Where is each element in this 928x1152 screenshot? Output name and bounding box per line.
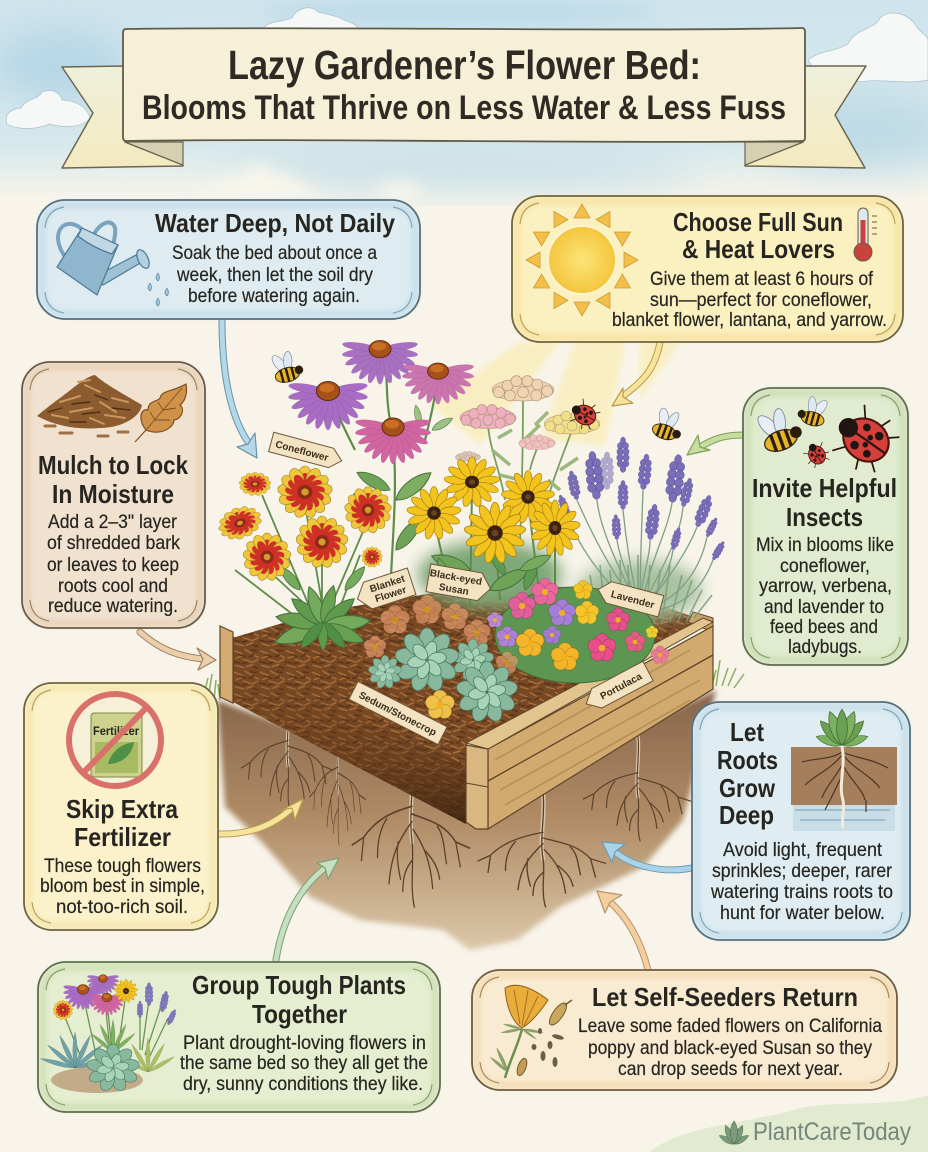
body text: reduce watering.: [48, 595, 178, 617]
plant: yarrow: [455, 376, 600, 540]
body text: before watering again.: [188, 285, 360, 307]
body text: can drop seeds for next year.: [618, 1058, 843, 1080]
bees and ladybug near flowers: [268, 348, 688, 444]
sun rays: [430, 342, 680, 445]
banner right tail: [745, 66, 866, 168]
coneflower heads: [342, 340, 418, 384]
panel box: [743, 388, 908, 665]
body text: [710, 839, 893, 924]
body text: Add a 2–3" layer: [48, 511, 177, 533]
top rim of side: [466, 618, 713, 749]
body text: Plant drought-loving flowers in: [183, 1032, 426, 1054]
heading: Let: [730, 717, 764, 747]
panel box: [37, 200, 420, 319]
heading: & Heat Lovers: [682, 234, 835, 264]
heading: Insects: [786, 502, 863, 532]
body text: [40, 855, 205, 918]
heading: Skip Extra: [66, 794, 178, 824]
panel: mulch: [22, 362, 205, 628]
body text: poppy and black-eyed Susan so they: [588, 1037, 872, 1059]
panel box: [22, 362, 205, 628]
panel box: [472, 970, 897, 1090]
roots: [241, 702, 690, 907]
label: Portulaca: [581, 661, 653, 714]
heading: In Moisture: [52, 479, 174, 509]
body text: Mix in blooms like: [756, 534, 894, 556]
label: Sedum/Stonecrop: Sedum/Stonecrop: [357, 690, 438, 739]
small sedum blooms: [364, 595, 518, 673]
watercolor sky: [0, 0, 928, 200]
icon: insects: [752, 393, 904, 479]
banner left tail: [62, 66, 183, 168]
body text: [578, 1015, 882, 1080]
label: Coneflower: [269, 432, 344, 470]
arrow: sun to bed: [612, 342, 660, 406]
icon: thermometer: [854, 208, 877, 261]
body text: yarrow, verbena,: [759, 575, 892, 597]
soil cut face: [232, 636, 466, 824]
yarrow stems: [488, 398, 578, 540]
body text: week, then let the soil dry: [176, 264, 373, 286]
mulch surface: [232, 585, 703, 745]
heading: Mulch to Lock: [38, 450, 188, 480]
panel: water deep: [37, 200, 420, 319]
label: Portulaca: Portulaca: [599, 671, 644, 702]
title line 1: Lazy Gardener’s Flower Bed:: [228, 42, 701, 88]
body text: Avoid light, frequent: [723, 839, 883, 861]
logo text: PlantCareToday: [753, 1118, 911, 1146]
label: Sedum/Stonecrop: [349, 681, 447, 745]
body text: [180, 1032, 428, 1095]
panel box: [24, 683, 218, 930]
heading: Group Tough Plants: [192, 970, 406, 1000]
low soft clouds: [195, 163, 422, 202]
heading: [66, 794, 178, 852]
heading: Invite Helpful: [752, 473, 897, 503]
body text: not-too-rich soil.: [56, 896, 188, 918]
panel: helpful insects: [743, 388, 908, 665]
heading: [673, 207, 843, 264]
front corner post: [466, 745, 488, 829]
label: Lavender: [595, 579, 664, 617]
arrow: water to bed: [222, 320, 257, 458]
title line 2: Blooms That Thrive on Less Water & Less Fuss: [142, 89, 786, 127]
blanket heads: [277, 466, 333, 519]
icon: autumn leaf: [135, 384, 187, 442]
heading: Choose Full Sun: [673, 207, 843, 237]
panel: self-seeders: [472, 970, 897, 1090]
icon: root diagram: [791, 709, 897, 831]
body text: [612, 268, 887, 331]
heading: [38, 450, 188, 509]
back rim: [688, 612, 713, 632]
label: Coneflower: Coneflower: [274, 439, 330, 464]
label: Lavender: Lavender: [610, 589, 656, 611]
ladybug: [565, 396, 602, 433]
right wooden side: [488, 626, 713, 829]
label: Black-eyed Susan: Black-eyed: [429, 568, 483, 588]
susan heads: [444, 457, 500, 507]
panel: group plants: [38, 962, 440, 1112]
panel: roots deep: [692, 702, 910, 940]
arrow: fertilizer to soil: [218, 799, 303, 834]
icon: sun: [526, 204, 638, 316]
body text: the same bed so they all get the: [180, 1052, 428, 1074]
plant: portulaca: [487, 578, 669, 683]
icon: mulch pile: [37, 375, 142, 436]
portulaca foliage: [495, 587, 655, 683]
plant: coneflower: [288, 340, 474, 600]
body text: blanket flower, lantana, and yarrow.: [612, 309, 887, 331]
arrow: group to soil: [276, 858, 339, 960]
body text: sprinkles; deeper, rarer: [712, 860, 892, 882]
body text: [47, 511, 180, 617]
icon: mini garden: [40, 974, 178, 1093]
body text: watering trains roots to: [710, 881, 893, 903]
icon: poppy and seeds: [489, 985, 572, 1078]
heading: [752, 473, 897, 532]
coneflower stems and leaves: [332, 360, 437, 600]
body text: and lavender to: [764, 596, 884, 618]
body text: sun—perfect for coneflower,: [650, 289, 872, 311]
rosettes: [451, 639, 495, 682]
yarrow clusters: [492, 376, 554, 401]
blanket stems and rosette: [235, 495, 368, 620]
clouds: [6, 8, 928, 129]
plant labels: [269, 432, 664, 745]
lavender foliage: [578, 555, 712, 622]
heading: Let Self-Seeders Return: [592, 982, 858, 1012]
raised garden bed: [220, 585, 713, 829]
plant: black-eyed susan: [407, 457, 580, 610]
arrow: insects to bed: [687, 435, 743, 455]
body text: Leave some faded flowers on California: [578, 1015, 882, 1037]
body text: [756, 534, 894, 658]
heading: Grow: [719, 773, 776, 803]
heading: [192, 970, 406, 1029]
label: Blanket Flower: Flower: [374, 585, 408, 605]
soil and roots: [217, 690, 716, 950]
body text: roots cool and: [58, 575, 168, 597]
label: Blanket Flower: Blanket: [369, 573, 407, 595]
icon: no fertilizer: [69, 694, 161, 786]
label: Blanket Flower: [353, 568, 416, 612]
body text: ladybugs.: [788, 636, 862, 658]
panel box: [512, 196, 903, 342]
heading: Fertilizer: [74, 822, 171, 852]
body text: Soak the bed about once a: [172, 242, 377, 264]
banner body: [123, 28, 805, 142]
heading: Water Deep, Not Daily: [155, 208, 395, 238]
bee left: [268, 348, 305, 385]
banner right fold: [745, 142, 803, 165]
icon: no fertilizer: Fertilizer: [93, 724, 139, 738]
body text: bloom best in simple,: [40, 875, 205, 897]
soil blob: [217, 690, 716, 950]
logo wash: [650, 1095, 928, 1152]
lavender stems: [568, 490, 713, 612]
arrow: roots panel to soil: [602, 842, 692, 870]
plant: sedum: [364, 595, 519, 724]
susan stems and leaves: [434, 490, 555, 610]
body text: coneflower,: [780, 555, 870, 577]
arrow: mulch to bed: [140, 632, 216, 670]
arrow: self-seeders to soil: [597, 891, 648, 970]
portulaca blooms: [532, 578, 558, 604]
susan foliage: [418, 541, 562, 609]
heading: [717, 717, 778, 830]
banner left fold: [125, 142, 183, 165]
label: Black-eyed Susan: Susan: [438, 582, 469, 598]
label: Black-eyed Susan: [426, 564, 493, 603]
heading: Deep: [719, 800, 774, 830]
body text: dry, sunny conditions they like.: [183, 1073, 423, 1095]
body text: [172, 242, 377, 307]
panel box: [692, 702, 910, 940]
logo: [718, 1118, 911, 1146]
plant: blanket flower: [213, 466, 392, 651]
heading: Roots: [717, 745, 778, 775]
title banner: [62, 28, 866, 168]
body text: These tough flowers: [44, 855, 201, 877]
panel: full sun: [512, 196, 903, 342]
bee right: [649, 405, 688, 444]
panel box: [38, 962, 440, 1112]
body text: hunt for water below.: [720, 902, 885, 924]
lavender spikes: [583, 451, 605, 500]
panel: skip fertilizer: [24, 683, 218, 930]
logo icon: [718, 1121, 750, 1146]
body text: Give them at least 6 hours of: [650, 268, 874, 290]
body text: or leaves to keep: [47, 554, 179, 576]
icon: watering can: [57, 222, 168, 306]
body text: feed bees and: [770, 616, 878, 638]
grass tufts: [203, 660, 744, 700]
body text: of shredded bark: [47, 532, 180, 554]
heading: Together: [252, 999, 347, 1029]
left wooden post: [220, 626, 233, 703]
plant: lavender: [556, 437, 727, 622]
